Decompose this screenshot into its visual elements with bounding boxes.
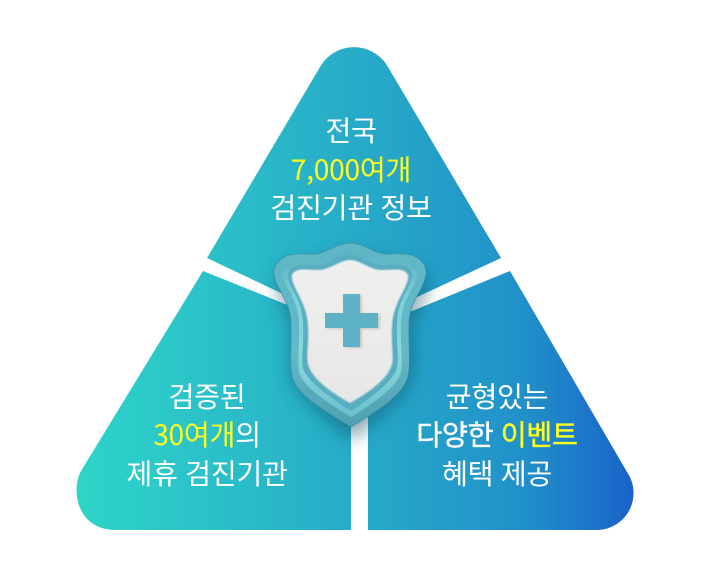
- text: top segment label: 전국: [325, 115, 377, 147]
- panel: bottom right segment: [368, 271, 634, 530]
- text: bottom right segment label: 다양한 이벤트: [416, 413, 578, 454]
- text: bottom left segment label: 제휴 검진기관: [126, 458, 288, 490]
- text: bottom left segment label: 검증된: [169, 381, 245, 413]
- text: bottom left segment label: [126, 381, 288, 490]
- text: bottom right segment label: 균형있는: [446, 381, 548, 413]
- icon: shield with medical cross: [274, 243, 426, 440]
- icon: medical cross: [325, 294, 380, 348]
- text: bottom right segment label: 혜택 제공: [442, 458, 552, 490]
- panel: top segment: [207, 47, 501, 310]
- text: bottom left segment label: 30여개의: [153, 413, 261, 454]
- text: top segment label: 7,000여개: [291, 148, 411, 189]
- panel: bottom left segment: [77, 271, 351, 530]
- text: top segment label: 검진기관 정보: [270, 192, 432, 224]
- text: top segment label: [270, 115, 432, 224]
- text: bottom right segment label: [416, 381, 578, 490]
